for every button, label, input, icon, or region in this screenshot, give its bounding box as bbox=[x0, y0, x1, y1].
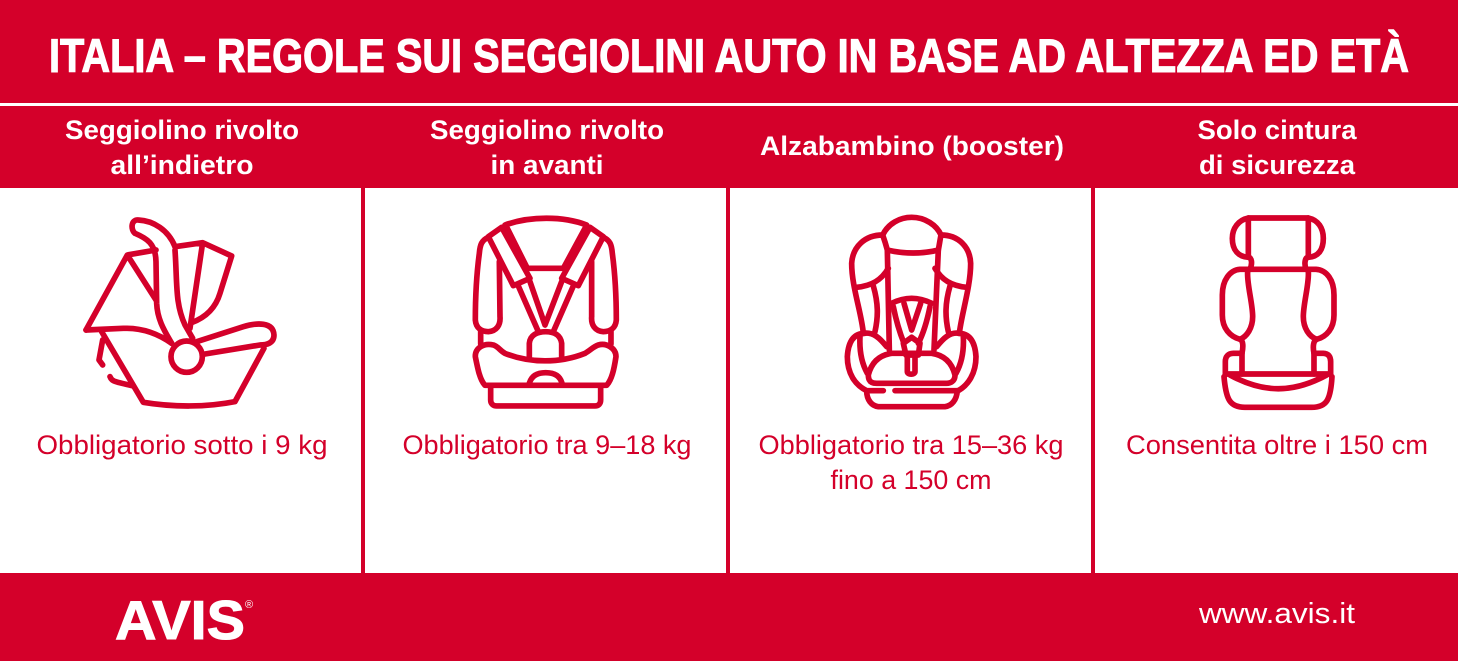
column divider 2 bbox=[726, 188, 730, 573]
caption: forward-facing: Obbligatorio tra 9–18 kg bbox=[402, 430, 692, 460]
column heading: booster: Alzabambino (booster) bbox=[760, 131, 1064, 161]
icon: infant carrier bbox=[86, 220, 274, 406]
column heading: seat belt only: Solo cintura bbox=[1198, 115, 1358, 145]
icon: booster seat bbox=[847, 217, 976, 407]
caption: booster: fino a 150 cm bbox=[830, 465, 992, 495]
header band bbox=[0, 0, 1458, 188]
icon: backless seat / belt only bbox=[1222, 218, 1334, 407]
column divider 1 bbox=[361, 188, 365, 573]
website: www.avis.it bbox=[1198, 598, 1355, 630]
column heading: forward-facing seat: Seggiolino rivolto bbox=[430, 115, 664, 145]
caption: seat belt only: Consentita oltre i 150 cm bbox=[1126, 430, 1428, 460]
icon: forward-facing seat bbox=[475, 218, 616, 406]
AVIS logo: ® bbox=[245, 599, 253, 611]
caption: booster: Obbligatorio tra 15–36 kg bbox=[758, 430, 1064, 460]
column heading: seat belt only: di sicurezza bbox=[1199, 150, 1356, 180]
caption: rear-facing: Obbligatorio sotto i 9 kg bbox=[36, 430, 328, 460]
column divider 3 bbox=[1091, 188, 1095, 573]
header rule bbox=[0, 103, 1458, 106]
column heading: rear-facing seat: all’indietro bbox=[110, 150, 254, 180]
column heading: rear-facing seat: Seggiolino rivolto bbox=[65, 115, 299, 145]
footer band bbox=[0, 573, 1458, 661]
column heading: forward-facing seat: in avanti bbox=[490, 150, 604, 180]
AVIS logo: AVIS bbox=[115, 589, 245, 651]
